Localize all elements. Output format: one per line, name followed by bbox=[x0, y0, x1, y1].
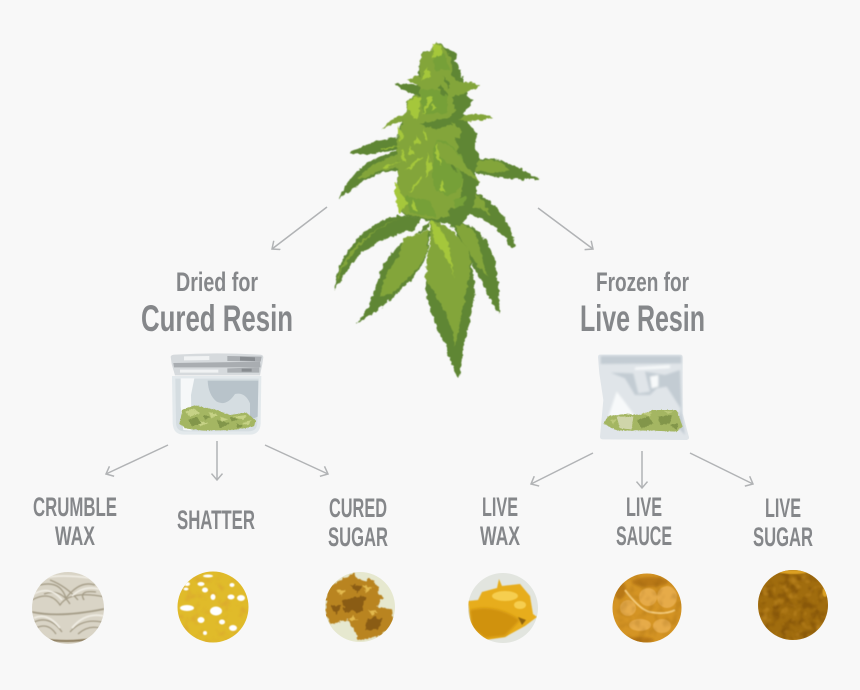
label: crumble wax: WAX bbox=[55, 521, 95, 551]
bud: outer silhouette bbox=[395, 41, 480, 227]
bag body bbox=[598, 355, 689, 440]
photo: live sugar bbox=[758, 570, 828, 640]
heading: dried for cured resin: Dried for bbox=[176, 267, 258, 297]
label: live sauce: SAUCE bbox=[616, 521, 672, 551]
arrow: bud to cured resin bbox=[272, 207, 327, 249]
bud: mid green body bbox=[396, 41, 467, 219]
label: live sauce: LIVE bbox=[626, 492, 662, 522]
leaf: lower left mid bbox=[356, 230, 431, 324]
heading: frozen for live resin: Frozen for bbox=[596, 267, 689, 297]
label: crumble wax bbox=[33, 492, 117, 551]
bud: dark accents bbox=[419, 77, 481, 227]
label: shatter: SHATTER bbox=[177, 505, 255, 535]
label: cured sugar: SUGAR bbox=[328, 522, 388, 552]
photo: shatter bbox=[178, 572, 248, 642]
label: live wax: LIVE bbox=[482, 492, 518, 522]
leaf: central big bbox=[426, 218, 475, 377]
heading: dried for cured resin: Cured Resin bbox=[141, 298, 293, 339]
leaf: upper right small bbox=[448, 83, 480, 97]
arrow: live to live wax bbox=[531, 453, 593, 484]
bud: light flecks bbox=[380, 43, 445, 214]
photo: crumble wax bbox=[32, 572, 104, 644]
bag folds bbox=[601, 356, 685, 435]
illustration: cannabis bud bbox=[335, 41, 539, 377]
arrow: live to live sugar bbox=[690, 453, 753, 484]
bud: small leaflets bbox=[383, 75, 493, 183]
arrow: cured to cured sugar bbox=[265, 445, 328, 474]
label: live sauce bbox=[616, 492, 672, 551]
heading: frozen for live resin: Live Resin bbox=[580, 298, 705, 339]
arrow: cured to shatter bbox=[216, 441, 218, 480]
photo: live wax bbox=[468, 573, 538, 643]
jar body bbox=[172, 376, 261, 435]
photo: cured sugar bbox=[324, 570, 396, 644]
arrow: live to live sauce bbox=[641, 451, 643, 488]
heading: frozen for live resin bbox=[580, 267, 705, 339]
label: live wax bbox=[480, 492, 520, 551]
bud: shadow tone bbox=[405, 50, 467, 220]
label: live wax: WAX bbox=[480, 521, 520, 551]
leaf: mid left lower bbox=[339, 148, 403, 199]
leaf: far right lower bbox=[452, 222, 499, 314]
leaf: mid left bbox=[348, 137, 402, 154]
heading: dried for cured resin bbox=[141, 267, 293, 339]
icon: glass jar bbox=[171, 353, 263, 435]
label: crumble wax: CRUMBLE bbox=[33, 492, 117, 522]
label: live sugar: LIVE bbox=[765, 493, 801, 523]
photo: live sauce bbox=[611, 572, 683, 644]
leaf: right bbox=[470, 158, 539, 180]
label: cured sugar: CURED bbox=[329, 493, 387, 523]
label: live sugar: SUGAR bbox=[753, 522, 813, 552]
icon: plastic bag bbox=[598, 355, 689, 440]
arrow: cured to crumble wax bbox=[106, 445, 168, 474]
jar contents bbox=[179, 405, 256, 431]
jar lid bbox=[171, 353, 263, 375]
label: cured sugar bbox=[328, 493, 388, 552]
label: live sugar bbox=[753, 493, 813, 552]
leaf: lower right bbox=[457, 191, 515, 248]
leaf: lower left long bbox=[335, 215, 422, 291]
arrow: bud to live resin bbox=[538, 208, 593, 249]
bag contents bbox=[603, 410, 683, 432]
